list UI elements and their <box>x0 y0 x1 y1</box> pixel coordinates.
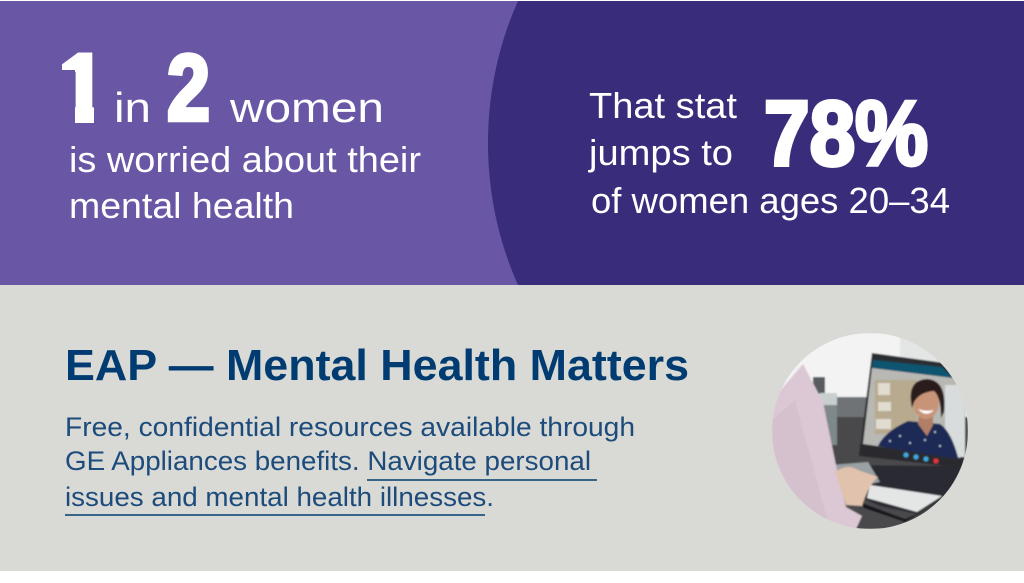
text: in: in <box>114 84 151 131</box>
text: is worried about their: is worried about their <box>69 139 421 180</box>
heading: EAP — Mental Health Matters <box>65 341 689 390</box>
big number 1: 1 <box>59 35 105 140</box>
body text <box>65 412 635 512</box>
person in foreground <box>772 364 862 529</box>
laptop screen <box>859 353 966 464</box>
text: of women ages 20–34: of women ages 20–34 <box>591 180 950 221</box>
text: jumps to: jumps to <box>588 132 733 173</box>
woman on screen <box>878 379 959 461</box>
body text: issues and mental health illnesses. <box>65 482 494 512</box>
text: That stat: That stat <box>589 85 737 126</box>
photo: woman on a video call <box>772 333 968 529</box>
laptop base <box>865 465 961 514</box>
panel: purple statistic <box>0 1 518 285</box>
hand <box>835 467 878 506</box>
panel: EAP information <box>0 285 1024 571</box>
shelves in video <box>875 380 917 434</box>
call control bar <box>860 445 963 466</box>
link underlines <box>65 480 597 515</box>
big number 2: 2 <box>167 35 210 140</box>
panel: dark purple statistic <box>488 1 1024 285</box>
body text: GE Appliances benefits. Navigate personal <box>65 446 591 476</box>
drinking glass <box>813 377 825 394</box>
text: mental health: mental health <box>69 185 294 226</box>
big number 78%: 78% <box>764 83 928 185</box>
body text: Free, confidential resources available through <box>65 412 635 442</box>
desk <box>815 417 968 529</box>
text: women: women <box>229 84 384 131</box>
